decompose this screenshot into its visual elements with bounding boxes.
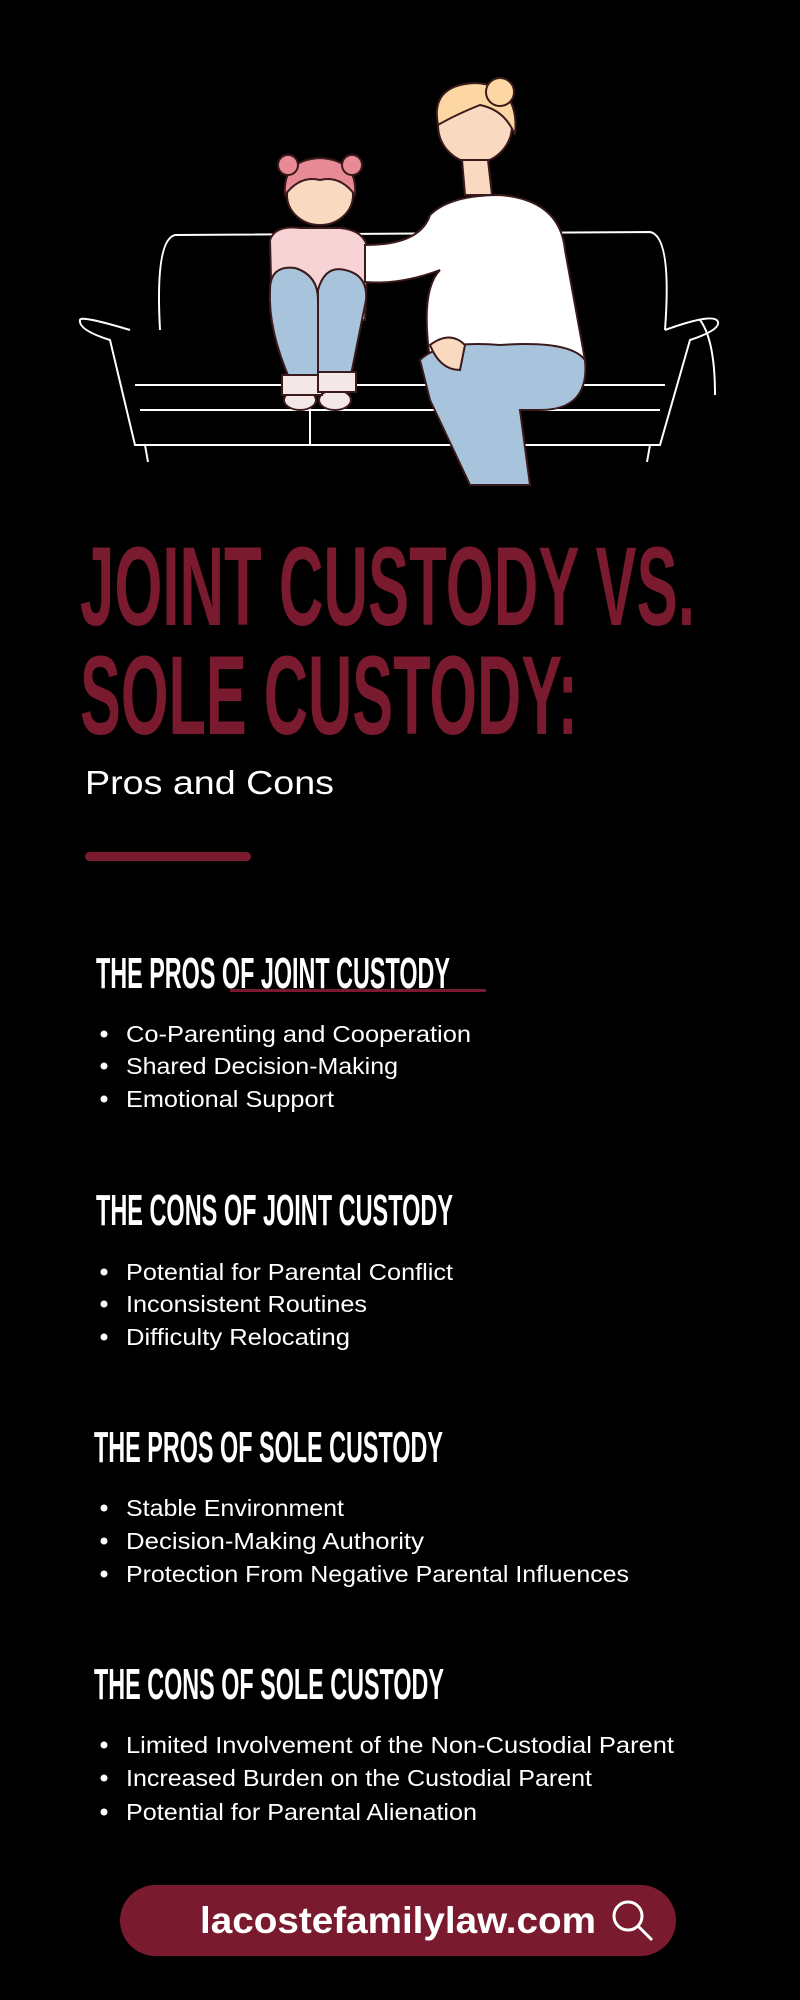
section: pros of joint custody: Emotional Support [126, 1086, 335, 1112]
section: cons of sole custody [94, 1660, 675, 1825]
section: pros of sole custody: Stable Environment [126, 1495, 345, 1521]
section: pros of joint custody [96, 949, 486, 1112]
section: cons of joint custody [96, 1186, 454, 1350]
footer: website pill [120, 1885, 676, 1956]
accent bar [85, 852, 251, 861]
sofa outline [80, 232, 718, 462]
section: cons of sole custody: Increased Burden on the Custodial Parent [126, 1765, 593, 1791]
icon: search [614, 1902, 652, 1940]
section: cons of joint custody: Inconsistent Routines [126, 1291, 367, 1317]
section: pros of sole custody: Protection From Negative Parental Influences [126, 1561, 629, 1587]
woman [365, 78, 585, 485]
subtitle: Pros and Cons [85, 764, 334, 801]
section: pros of sole custody [94, 1423, 629, 1587]
illustration: mother comforting child on sofa [80, 78, 718, 485]
section: cons of sole custody: THE CONS OF SOLE CUSTODY [94, 1660, 444, 1709]
section: cons of joint custody: Difficulty Relocating [126, 1324, 350, 1350]
title [80, 524, 695, 758]
section: pros of sole custody: THE PROS OF SOLE CUSTODY [94, 1423, 443, 1472]
section: cons of joint custody: Potential for Parental Conflict [126, 1259, 454, 1285]
footer: website pill: lacostefamilylaw.com [200, 1900, 596, 1941]
section: pros of sole custody: Decision-Making Authority [126, 1528, 425, 1554]
section: cons of sole custody: Potential for Parental Alienation [126, 1799, 477, 1825]
section: cons of sole custody: Limited Involvement of the Non-Custodial Parent [126, 1732, 675, 1758]
section: pros of joint custody: Shared Decision-Making [126, 1053, 398, 1079]
section: cons of joint custody: THE CONS OF JOINT CUSTODY [96, 1186, 453, 1235]
child [270, 155, 368, 410]
section: pros of joint custody: THE PROS OF JOINT CUSTODY [96, 949, 450, 998]
section: pros of joint custody: Co-Parenting and Cooperation [126, 1021, 471, 1047]
